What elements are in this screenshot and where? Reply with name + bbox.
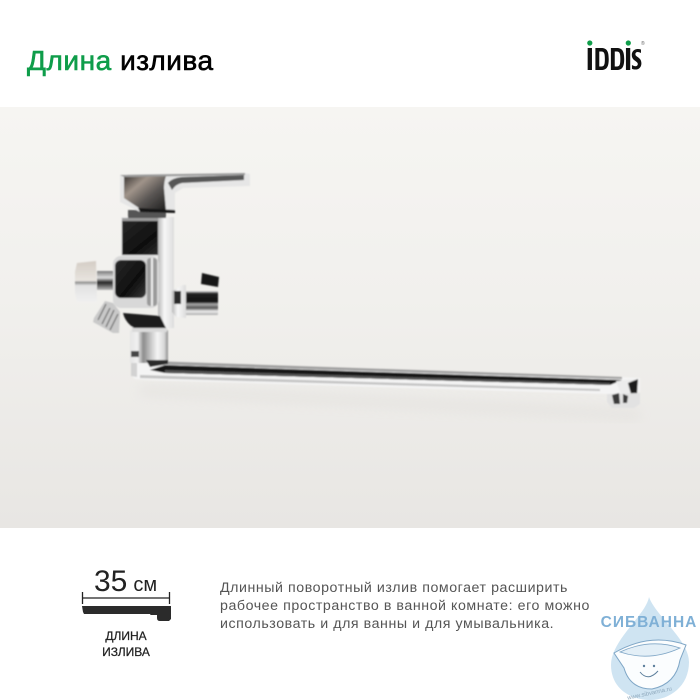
dimension caption: ИЗЛИВА	[102, 645, 150, 659]
faucet body column	[121, 210, 174, 328]
spout shadow	[140, 385, 640, 420]
description text: Длинный поворотный излив помогает расширить	[220, 580, 568, 596]
long spout	[131, 361, 640, 408]
photo: bath faucet with long spout	[0, 107, 700, 528]
logo: iDDiS	[587, 40, 645, 70]
side nut	[75, 261, 113, 302]
description text	[220, 580, 590, 632]
watermark: Sibvanna: СИБВАННА	[601, 614, 697, 631]
dimension icon: spout length 35 cm	[82, 565, 171, 621]
threaded outlet	[93, 301, 120, 333]
watermark: Sibvanna	[601, 597, 697, 700]
title: Длина излива	[27, 45, 214, 76]
swivel collar	[130, 326, 168, 367]
dimension caption	[102, 629, 150, 659]
diverter block	[113, 256, 159, 308]
dimension line	[82, 592, 171, 621]
lever handle	[120, 173, 250, 213]
dimension caption: ДЛИНА	[105, 629, 147, 643]
description text: использовать и для ванны и для умывальника.	[220, 616, 554, 632]
logo: iDDiS: ®	[641, 40, 645, 47]
shower holder	[172, 273, 219, 318]
aerator	[607, 393, 640, 408]
description text: рабочее пространство в ванной комнате: его можно	[220, 598, 590, 614]
dimension value: 35 см	[94, 565, 157, 598]
